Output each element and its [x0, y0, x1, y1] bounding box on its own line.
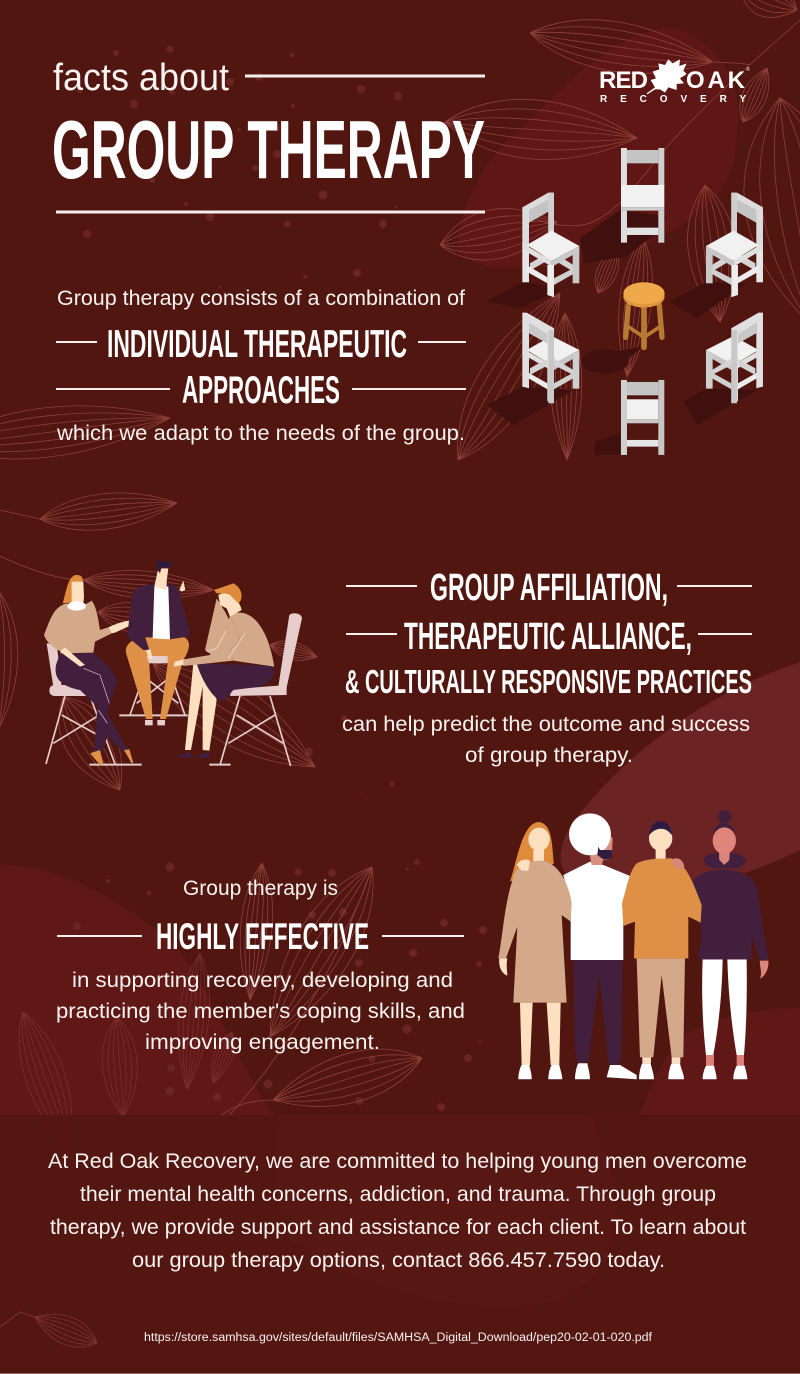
- closing paragraph: therapy, we provide support and assistance for each client. To learn about: [50, 1215, 746, 1239]
- text block: individual therapeutic approaches: which we adapt to the needs of the group.: [56, 421, 465, 445]
- seated man, middle: [119, 561, 190, 725]
- text block: highly effective: Group therapy is: [183, 876, 338, 900]
- title kicker: facts about: [53, 57, 229, 99]
- source url: https://store.samhsa.gov/sites/default/files/SAMHSA_Digital_Download/pep20-02-01-020.pdf: [144, 1332, 653, 1344]
- text block: group affiliation and therapeutic alliance: [342, 567, 752, 767]
- logo: Red Oak Recovery: OAK: [686, 67, 746, 94]
- text block: individual therapeutic approaches: APPROACHES: [182, 369, 340, 412]
- text block: individual therapeutic approaches: INDIVIDUAL THERAPEUTIC: [107, 323, 407, 366]
- closing paragraph: their mental health concerns, addiction, and trauma. Through group: [80, 1182, 716, 1206]
- icon: oak leaf: [647, 59, 687, 94]
- closing paragraph: [48, 1149, 747, 1272]
- chair: lower right: [706, 313, 763, 403]
- chair: top: [621, 148, 664, 243]
- person: man in orange sweater: [622, 821, 702, 1079]
- text block: group affiliation and therapeutic alliance: of group therapy.: [465, 743, 633, 767]
- illustration: four people standing together: [498, 810, 768, 1079]
- text block: highly effective: in supporting recovery, developing and: [72, 968, 453, 992]
- seated woman, right: [173, 583, 302, 766]
- chair: bottom: [621, 380, 664, 455]
- illustration: circle of chairs and stool: [487, 148, 763, 455]
- chair: upper right: [706, 193, 763, 297]
- closing paragraph: At Red Oak Recovery, we are committed to helping young men overcome: [48, 1149, 747, 1173]
- chair: lower left: [522, 313, 579, 403]
- logo: Red Oak Recovery: RED: [599, 67, 648, 94]
- footer band: [0, 1115, 800, 1374]
- illustration: three people talking in chairs: [44, 561, 302, 766]
- closing paragraph: our group therapy options, contact 866.457.7590 today.: [132, 1248, 665, 1272]
- text block: highly effective: practicing the member's coping skills, and: [56, 999, 465, 1023]
- text block: individual therapeutic approaches: [56, 286, 466, 445]
- seated woman, left: [44, 575, 142, 765]
- title block: [52, 57, 485, 212]
- text block: highly effective: improving engagement.: [145, 1030, 380, 1054]
- floating dots: [73, 46, 487, 1111]
- person: man with turban: [563, 813, 637, 1079]
- main title: GROUP THERAPY: [52, 103, 485, 196]
- logo: Red Oak Recovery: RECOVERY: [600, 94, 746, 105]
- text block: highly effective: [56, 876, 465, 1054]
- logo: Red Oak Recovery: ®: [746, 66, 750, 73]
- person: woman in tan dress: [498, 822, 572, 1079]
- text block: highly effective: HIGHLY EFFECTIVE: [156, 916, 369, 957]
- chair: upper left: [522, 193, 579, 297]
- text block: individual therapeutic approaches: Group therapy consists of a combination of: [57, 286, 465, 310]
- logo: Red Oak Recovery: [599, 59, 750, 105]
- stool: [623, 282, 665, 347]
- person: hooded woman: [693, 810, 768, 1079]
- text block: group affiliation and therapeutic alliance: can help predict the outcome and success: [342, 712, 750, 736]
